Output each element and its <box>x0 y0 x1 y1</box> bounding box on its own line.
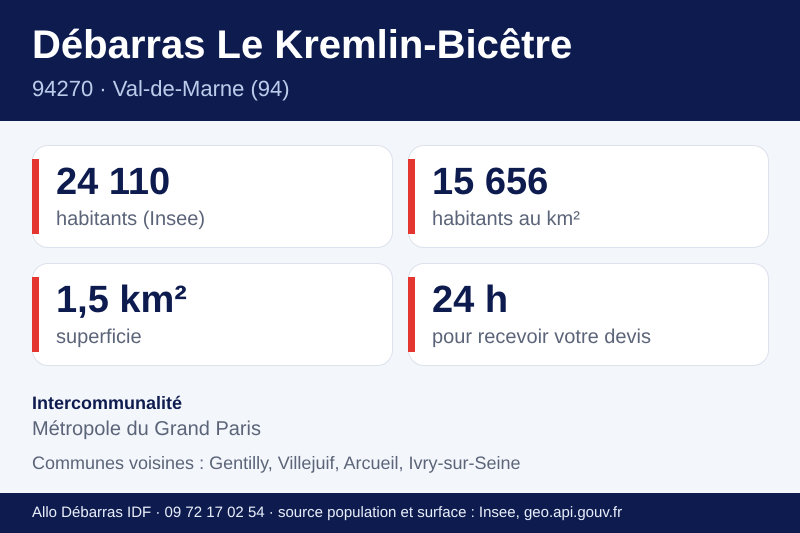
stat value: 15 656 <box>432 161 548 203</box>
accent bar <box>32 159 39 234</box>
footer text: Allo Débarras IDF · 09 72 17 02 54 · source population et surface : Insee, geo.api.gouv.fr <box>32 504 622 521</box>
stat label: habitants au km² <box>432 208 580 230</box>
stat label: superficie <box>56 326 142 348</box>
accent bar <box>408 159 415 234</box>
stat value: 24 110 <box>56 161 170 203</box>
stat label: habitants (Insee) <box>56 208 205 230</box>
panel: population <box>32 145 393 248</box>
header band <box>0 0 800 121</box>
panel: area <box>32 263 393 366</box>
stat value: 1,5 km² <box>56 279 187 321</box>
footer band <box>0 493 800 533</box>
subtitle: 94270 · Val-de-Marne (94) <box>32 76 290 101</box>
stat value: 24 h <box>432 279 508 321</box>
panel: quote delay <box>408 263 769 366</box>
stat label: pour recevoir votre devis <box>432 326 651 348</box>
neighbouring communes: Communes voisines : Gentilly, Villejuif, Arcueil, Ivry-sur-Seine <box>32 453 521 473</box>
intercommunality heading: Intercommunalité <box>32 393 182 413</box>
title: Débarras Le Kremlin-Bicêtre <box>32 23 572 67</box>
intercommunality value: Métropole du Grand Paris <box>32 418 261 440</box>
accent bar <box>32 277 39 352</box>
accent bar <box>408 277 415 352</box>
panel: density <box>408 145 769 248</box>
